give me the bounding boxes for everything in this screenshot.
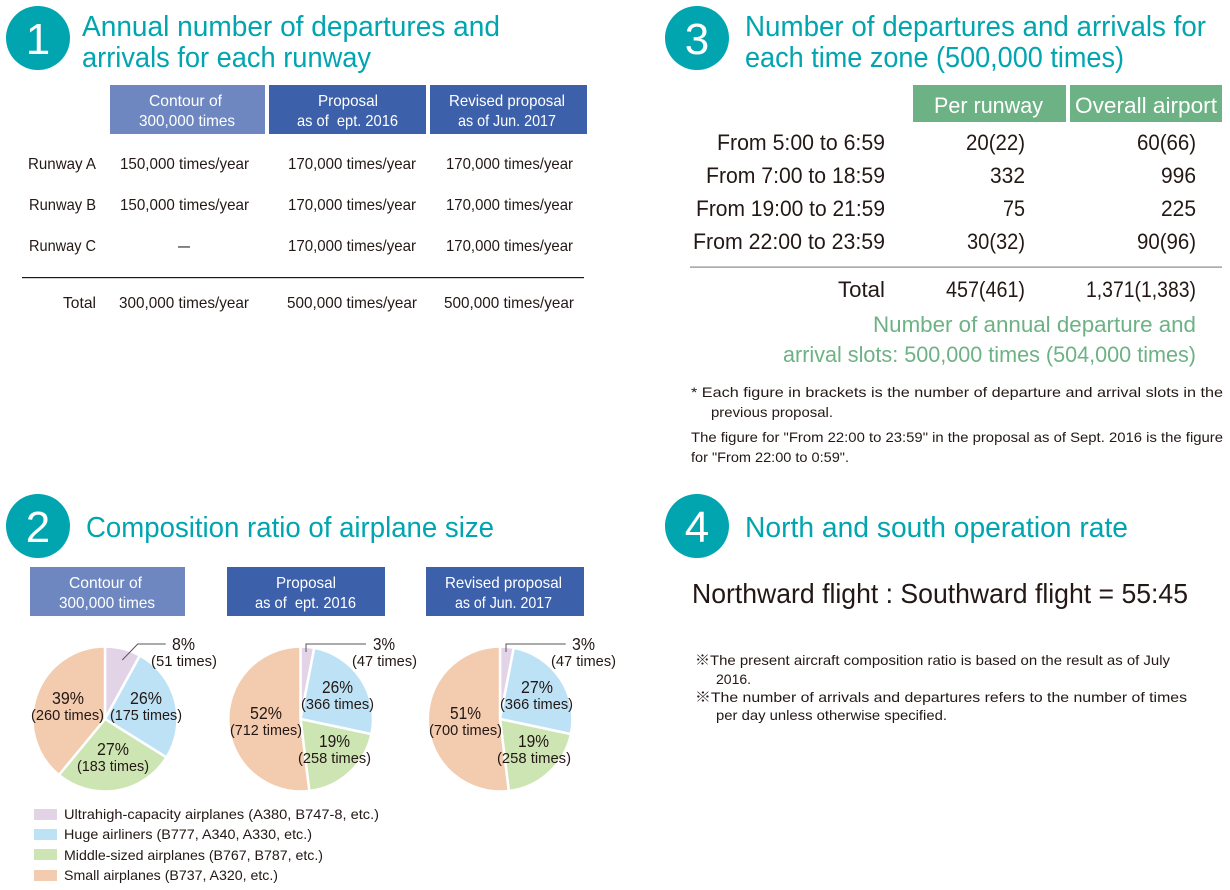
column header: contour [110, 85, 265, 134]
time zone table rows: 20(22) [966, 130, 1025, 155]
runway table rows: Runway B [29, 197, 96, 214]
number badge 3 [665, 6, 729, 70]
pie chart: revised proposal as of Jun. 2017: 19% [518, 731, 549, 751]
annual slots callout: Number of annual departure and [873, 312, 1196, 337]
pie chart: proposal as of Sept. 2016: 52% [250, 703, 282, 723]
pie chart: proposal as of Sept. 2016 [228, 634, 417, 791]
time zone table rows: From 22:00 to 23:59 [693, 229, 885, 254]
column header: per runway [913, 85, 1066, 122]
runway table rows: 170,000 times/year [288, 238, 417, 255]
notes for panel 4: 2016. [716, 671, 751, 687]
runway table rows: 170,000 times/year [446, 238, 574, 255]
pie chart: contour of 300,000 times: (260 times) [31, 707, 104, 724]
pie chart: contour of 300,000 times: 26% [130, 688, 162, 708]
time zone table rows [690, 130, 1222, 302]
pie chart: proposal as of Sept. 2016: (366 times) [301, 696, 374, 713]
time zone table rows: From 7:00 to 18:59 [706, 163, 885, 188]
pie header: proposal: Proposal [276, 575, 336, 592]
notes for panel 4: ※The present aircraft composition ratio is based on the result as of July [695, 652, 1170, 668]
runway table rows: Runway A [28, 156, 96, 173]
pie chart: revised proposal as of Jun. 2017: (700 times) [429, 722, 502, 739]
column header: proposal: Proposal [318, 93, 378, 110]
pie chart: revised proposal as of Jun. 2017: (47 times) [551, 653, 616, 670]
time zone table rows: 457(461) [946, 277, 1025, 302]
number badge 4 [665, 494, 729, 558]
legend: airplane sizes: Huge airliners (B777, A340, A330, etc.) [64, 826, 312, 842]
heading 1: Annual number of departures and [82, 11, 500, 43]
runway table rows: 170,000 times/year [288, 156, 417, 173]
column header: overall airport: Overall airport [1075, 93, 1217, 118]
runway table rows: 500,000 times/year [444, 295, 575, 312]
column header: proposal [269, 85, 426, 134]
time zone table rows: 75 [1003, 196, 1025, 221]
heading 1 [82, 11, 500, 74]
pie header: contour [30, 567, 185, 616]
annual slots callout [783, 312, 1196, 367]
column header: revised proposal: Revised proposal [449, 93, 565, 110]
runway table rows: 150,000 times/year [120, 197, 250, 214]
pie chart: proposal as of Sept. 2016: 3% [373, 634, 395, 654]
column header: overall airport [1070, 85, 1222, 122]
runway table rows: — [178, 238, 190, 255]
time zone table rows: From 5:00 to 6:59 [717, 130, 885, 155]
footnotes for panel 3: The figure for "From 22:00 to 23:59" in the proposal as of Sept. 2016 is the figure [691, 429, 1223, 445]
legend: airplane sizes: Ultrahigh-capacity airplanes (A380, B747-8, etc.) [64, 806, 379, 822]
pie header: contour: 300,000 times [59, 595, 155, 612]
pie chart: contour of 300,000 times: (51 times) [151, 653, 217, 670]
pie chart: contour of 300,000 times: 39% [52, 688, 84, 708]
time zone table rows: 60(66) [1137, 130, 1196, 155]
annual slots callout: arrival slots: 500,000 times (504,000 times) [783, 342, 1196, 367]
column header: revised proposal [430, 85, 587, 134]
pie chart: proposal as of Sept. 2016: 26% [322, 677, 353, 697]
time zone table rows: 90(96) [1137, 229, 1196, 254]
heading 3 [745, 11, 1206, 74]
runway table rows: 150,000 times/year [120, 156, 250, 173]
legend: airplane sizes: Small airplanes (B737, A320, etc.) [64, 867, 278, 883]
runway table rows: 170,000 times/year [288, 197, 417, 214]
time zone table rows: From 19:00 to 21:59 [696, 196, 885, 221]
pie chart: proposal as of Sept. 2016: (47 times) [352, 653, 417, 670]
pie chart: proposal as of Sept. 2016: 19% [319, 731, 350, 751]
time zone table rows: 1,371(1,383) [1086, 277, 1196, 302]
runway table rows: Total [63, 295, 96, 312]
number badge 1: 1 [26, 15, 50, 64]
notes for panel 4: ※The number of arrivals and departures refers to the number of times [695, 689, 1187, 705]
pie chart: revised proposal as of Jun. 2017: (258 times) [497, 750, 571, 767]
heading 2: Composition ratio of airplane size [86, 512, 494, 544]
runway table rows: 500,000 times/year [287, 295, 418, 312]
runway table rows: Runway C [29, 238, 96, 255]
number badge 3: 3 [685, 15, 709, 64]
pie chart: revised proposal as of Jun. 2017: 3% [572, 634, 595, 654]
number badge 4: 4 [685, 503, 709, 552]
notes for panel 4: per day unless otherwise specified. [716, 707, 947, 723]
pie header: contour: Contour of [69, 575, 143, 592]
pie chart: proposal as of Sept. 2016: (712 times) [230, 722, 302, 739]
pie chart: contour of 300,000 times [31, 634, 217, 792]
pie header: revised proposal: Revised proposal [445, 575, 562, 592]
column header: contour: Contour of [149, 93, 223, 110]
column header: revised proposal: as of Jun. 2017 [458, 113, 556, 130]
time zone table rows: 30(32) [967, 229, 1025, 254]
heading 3: Number of departures and arrivals for [745, 11, 1206, 43]
time zone table rows: 996 [1161, 163, 1196, 188]
legend: airplane sizes: Middle-sized airplanes (B767, B787, etc.) [64, 847, 323, 863]
pie header: revised proposal [426, 567, 584, 616]
notes for panel 4 [695, 652, 1187, 723]
number badge 2: 2 [26, 503, 50, 552]
pie header: proposal [227, 567, 385, 616]
heading 1: arrivals for each runway [82, 42, 371, 74]
pie chart: contour of 300,000 times: 8% [172, 634, 195, 654]
panel 1: runway departures and arrivals [6, 6, 587, 312]
pie chart: contour of 300,000 times: 27% [97, 739, 129, 759]
pie header: revised proposal: as of Jun. 2017 [455, 595, 552, 612]
runway table rows [22, 156, 584, 312]
runway table rows: 170,000 times/year [446, 197, 574, 214]
time zone table rows: 225 [1161, 196, 1196, 221]
time zone table rows: Total [838, 277, 885, 302]
operation rate statement: Northward flight : Southward flight = 55:45 [692, 578, 1188, 609]
column header: per runway: Per runway [934, 93, 1043, 118]
footnotes for panel 3: previous proposal. [711, 404, 833, 420]
pie chart: contour of 300,000 times: (183 times) [77, 758, 149, 775]
panel 4: north and south operation rate [665, 494, 1188, 723]
column header: proposal: as of ept. 2016 [297, 113, 398, 130]
footnotes for panel 3 [691, 384, 1223, 465]
pie chart: revised proposal as of Jun. 2017: 51% [450, 703, 481, 723]
footnotes for panel 3: for "From 22:00 to 0:59". [691, 449, 849, 465]
heading 3: each time zone (500,000 times) [745, 42, 1124, 74]
heading 4: North and south operation rate [745, 512, 1128, 544]
panel 3: departures and arrivals per time zone [665, 6, 1223, 465]
panel 2: composition ratio of airplane size [6, 494, 616, 883]
footnotes for panel 3: * Each figure in brackets is the number of departure and arrival slots in the [691, 384, 1223, 400]
pie header: proposal: as of ept. 2016 [255, 595, 356, 612]
pie chart: contour of 300,000 times: (175 times) [110, 707, 182, 724]
runway table rows: 170,000 times/year [446, 156, 574, 173]
legend: airplane sizes [34, 806, 379, 883]
column header: contour: 300,000 times [139, 113, 235, 130]
pie chart: proposal as of Sept. 2016: (258 times) [298, 750, 371, 767]
pie chart: revised proposal as of Jun. 2017 [428, 634, 616, 791]
runway table rows: 300,000 times/year [119, 295, 250, 312]
pie chart: revised proposal as of Jun. 2017: (366 times) [500, 696, 573, 713]
time zone table rows: 332 [990, 163, 1025, 188]
pie chart: revised proposal as of Jun. 2017: 27% [521, 677, 553, 697]
number badge 2 [6, 494, 70, 558]
number badge 1 [6, 6, 70, 70]
